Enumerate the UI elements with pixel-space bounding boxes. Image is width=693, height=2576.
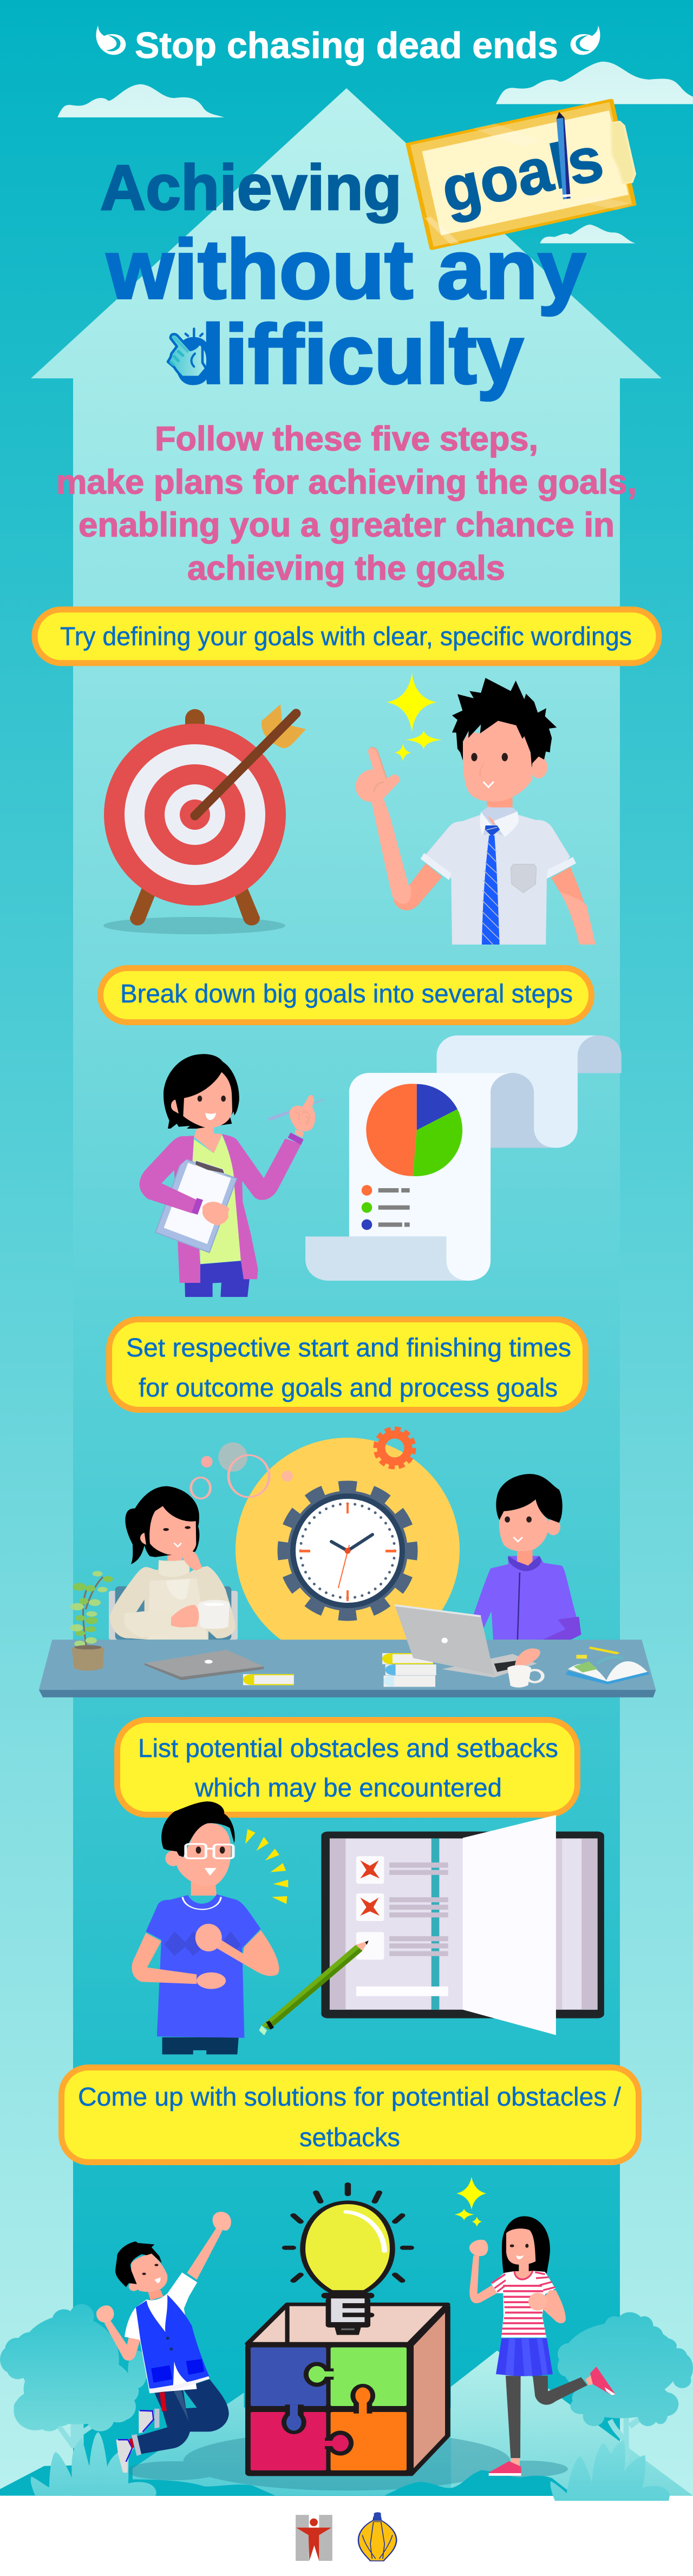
collar: [514, 2271, 533, 2279]
pants: [185, 1261, 250, 1297]
hands: [195, 1924, 226, 1989]
ear: [530, 756, 547, 778]
pants: [137, 2379, 229, 2454]
minute dots: [300, 1504, 395, 1598]
holding hand: [171, 1605, 199, 1628]
icon: left swoosh: [96, 25, 126, 55]
back roll: [578, 1035, 622, 1073]
white footer bar: [356, 1987, 448, 1996]
clipboard board: [408, 100, 635, 248]
rays: [285, 2185, 411, 2280]
puzzle piece green: [331, 2348, 407, 2406]
subtitle: achieving the goals: [187, 549, 505, 587]
mouth: [154, 2277, 160, 2283]
neck: [148, 2290, 164, 2300]
ear: [140, 1533, 146, 1545]
vest buttons: [166, 2337, 173, 2351]
front sheet: [349, 1073, 513, 1281]
step 5 pill: Come up with solutions for potential obstacles /: [78, 2083, 622, 2112]
mouth: [483, 782, 493, 787]
knob: blue into pink: [282, 2404, 306, 2434]
raised hand: [290, 1095, 315, 1138]
target shadow: [103, 917, 285, 934]
subtitle: make plans for achieving the goals,: [56, 463, 637, 501]
right fist: [528, 2292, 547, 2311]
open book: [566, 1657, 650, 1684]
closed laptop: [145, 1650, 264, 1680]
girl cheering: [454, 2177, 616, 2476]
light bulb: [285, 2185, 411, 2292]
upper shoe: [139, 2409, 159, 2433]
lower fist: [96, 2305, 114, 2323]
sweater gap: [136, 1600, 145, 1612]
target stand: [130, 709, 260, 926]
checklist item 2: [356, 1893, 448, 1921]
vest pockets: [151, 2359, 204, 2383]
mug: [507, 1665, 542, 1688]
eyes: [510, 2244, 528, 2248]
cardigan right: [222, 1134, 302, 1279]
subtitle: enabling you a greater chance in: [79, 506, 614, 544]
face: [463, 721, 532, 802]
left sleeve: [140, 1136, 197, 1214]
holding hand: [202, 1202, 230, 1225]
box side: [411, 2307, 448, 2474]
table edge: [39, 1690, 656, 1697]
skin arms: [132, 1930, 279, 1984]
eyes: [471, 753, 508, 761]
vest: [136, 2295, 210, 2389]
sparkles: [454, 2177, 486, 2227]
hour marks: [299, 1503, 396, 1601]
neck: [194, 1127, 222, 1153]
upper left arm: [394, 863, 442, 910]
ear: [546, 1519, 560, 1535]
cuffs: [192, 1132, 304, 1215]
clock and gears: [236, 1429, 460, 1662]
mouth: [205, 1868, 217, 1876]
scroll with pie chart: [305, 1035, 622, 1281]
clock hands: [331, 1535, 372, 1588]
notebook checklist: [321, 1815, 604, 2035]
chin hand: [181, 1550, 202, 1571]
collar: [480, 808, 519, 837]
t-shirt: [146, 1894, 261, 2038]
right tree: [558, 2312, 693, 2462]
checklist item 1: [356, 1856, 448, 1884]
step 2 pill: Break down big goals into several steps: [120, 980, 573, 1008]
orange gear: [376, 1429, 414, 1467]
emphasis ticks: [245, 1829, 288, 1904]
hair: [115, 2241, 162, 2287]
inner flap line: [285, 2304, 290, 2344]
right arm: [540, 2290, 566, 2323]
target rings: [104, 724, 286, 906]
hair: [496, 1474, 563, 1523]
clock face: [293, 1496, 402, 1605]
hair: [161, 1801, 235, 1857]
step 5 pill: setbacks: [299, 2123, 400, 2152]
man with glasses: [132, 1801, 369, 2054]
red stripe: [160, 2392, 167, 2411]
face: [506, 2228, 535, 2265]
glasses: [186, 1844, 233, 1858]
glass: [303, 2203, 393, 2292]
inner roll: [491, 1073, 556, 1148]
knob: green into blue: [304, 2362, 334, 2387]
t-shirt: [125, 2272, 197, 2393]
desk scene: [39, 1571, 656, 1697]
shirt diamonds: [165, 1931, 241, 1956]
title line 3: difficulty: [173, 307, 524, 401]
single book: [243, 1674, 294, 1685]
cup: [198, 1600, 230, 1629]
woman thinking: [109, 1486, 238, 1640]
flipping page: [463, 1815, 556, 2035]
zipper: [518, 1572, 520, 1640]
step 3 pill: [109, 1320, 586, 1410]
sleeve: [124, 1609, 173, 1637]
face: [499, 1499, 548, 1551]
right arm: [551, 867, 596, 945]
title line 1: Achieving: [100, 152, 402, 224]
neck: [517, 1549, 533, 1565]
neck: [191, 1882, 217, 1896]
face: [131, 2253, 167, 2292]
ear: [129, 2282, 139, 2291]
bottom landscape: [0, 2304, 693, 2501]
sleeve cuffs: [421, 853, 576, 880]
shadows: [126, 2431, 568, 2490]
raised arm: [187, 2227, 223, 2280]
ankles: [510, 2373, 594, 2466]
left arm: [469, 2255, 497, 2303]
jacket: [474, 1556, 581, 1655]
hair: [125, 1486, 199, 1564]
checklist item 3: [356, 1932, 448, 1959]
mouth: [174, 1543, 181, 1546]
chair: [109, 1587, 238, 1640]
man with laptop: [474, 1474, 581, 1655]
bookmark band: [432, 1838, 439, 2010]
page shading: [330, 1838, 598, 2010]
ear: [171, 1100, 179, 1113]
shirt hem: [148, 2376, 210, 2393]
tie: [482, 825, 500, 945]
puzzle piece orange: [331, 2412, 407, 2470]
open laptop: [395, 1604, 537, 1677]
hair: [164, 1054, 239, 1129]
pants fold: [173, 2389, 189, 2421]
clipboard: [155, 1158, 237, 1253]
step 3 pill: for outcome goals and process goals: [139, 1374, 558, 1402]
clouds: [57, 62, 693, 243]
turtle neck: [158, 1559, 189, 1577]
highlight: [346, 2212, 384, 2251]
box front: [245, 2344, 413, 2476]
pencil: [259, 1941, 369, 2035]
book stack: [382, 1653, 436, 1687]
raised fist: [213, 2212, 231, 2231]
icon: finger snap hand: [168, 329, 206, 377]
hair: [502, 2216, 550, 2273]
back sheet: [437, 1035, 599, 1148]
top heading: Stop chasing dead ends: [135, 25, 558, 66]
pages: [330, 1838, 598, 2010]
step 1 pill: Try defining your goals with clear, specific wordings: [60, 622, 632, 651]
face: [149, 1506, 196, 1556]
lower shoe: [116, 2434, 141, 2473]
step 1 pill: [35, 609, 659, 663]
bulb base: [321, 2293, 374, 2335]
foreground mounds: [0, 2466, 574, 2495]
badge: [511, 864, 537, 893]
eyes: [142, 2264, 159, 2275]
footer logos: [296, 2512, 396, 2561]
neck: [167, 1552, 182, 1562]
logo: golden hands: [358, 2512, 396, 2561]
subtitle: Follow these five steps,: [155, 420, 538, 458]
large gear: [284, 1487, 411, 1614]
knob: orange into green: [350, 2384, 375, 2414]
striped top: [491, 2271, 555, 2338]
shirt: [426, 815, 570, 945]
boy jumping: [96, 2212, 231, 2473]
legs: [506, 2376, 587, 2458]
left tree: [0, 2304, 148, 2448]
hills: [133, 2351, 693, 2495]
icon: right swoosh: [571, 25, 600, 55]
step 4 pill: List potential obstacles and setbacks: [138, 1734, 558, 1763]
notebook cover: [321, 1832, 604, 2018]
mouth: [205, 1113, 216, 1120]
pants: [162, 2037, 239, 2054]
right grass: [551, 2440, 670, 2501]
mouth: [514, 1537, 522, 1542]
pencil and eraser: [576, 1647, 619, 1659]
title line 2: without any: [106, 222, 586, 316]
woman with clipboard: [140, 1054, 324, 1297]
neck: [514, 2263, 533, 2279]
eyes: [198, 1096, 226, 1102]
forearm and hand: [356, 748, 411, 904]
puzzle piece pink: [251, 2412, 326, 2470]
sparkles: [387, 673, 442, 762]
sweater front: [148, 1579, 207, 1640]
sweater cable: [166, 1579, 191, 1600]
face: [183, 1072, 232, 1128]
bottom roll: [305, 1236, 468, 1281]
thought bubbles: [191, 1443, 293, 1498]
nose: [480, 763, 484, 776]
pie chart: [366, 1084, 462, 1176]
legend: [362, 1185, 410, 1230]
top: [192, 1135, 241, 1264]
lower sleeve: [533, 1617, 581, 1655]
pen: [269, 1099, 324, 1120]
shoes: [489, 2367, 616, 2476]
eyes: [196, 1846, 225, 1853]
face: [176, 1823, 231, 1886]
step 3 pill: Set respective start and finishing times: [126, 1334, 571, 1362]
yellow circle: [236, 1438, 460, 1662]
cardigan left body: [174, 1136, 200, 1283]
hand on laptop: [515, 1648, 540, 1667]
step 4 pill: which may be encountered: [194, 1774, 502, 1802]
sweater: [110, 1566, 236, 1640]
left grass: [31, 2432, 156, 2496]
clipboard with the word goals: [408, 100, 635, 248]
step 5 pill: [62, 2068, 639, 2162]
pen: [557, 112, 571, 199]
knob: pink into orange: [325, 2431, 354, 2456]
puzzle piece blue: [251, 2348, 326, 2406]
collar: [182, 1897, 221, 1910]
eyes: [505, 1517, 532, 1523]
boy pointing: [356, 673, 596, 945]
potted plant: [70, 1571, 113, 1671]
neck: [487, 797, 513, 821]
box top: [247, 2304, 448, 2344]
word goals: goals: [435, 123, 609, 225]
ear: [165, 1851, 181, 1866]
arrow in target: [195, 704, 306, 816]
step 2 pill: [101, 968, 591, 1022]
table top: [39, 1640, 656, 1690]
hair: [452, 678, 557, 768]
eyes: [163, 1526, 191, 1531]
skirt: [496, 2338, 553, 2376]
white footer band: [0, 2496, 693, 2576]
lower arm: [104, 2320, 140, 2361]
left fist: [469, 2240, 488, 2256]
leg gap: [183, 2389, 197, 2408]
mouth: [516, 2255, 524, 2259]
puzzle box: [245, 2293, 448, 2476]
finger creases: [371, 748, 387, 792]
collar: [508, 1556, 541, 1571]
step 4 pill: [117, 1720, 577, 1814]
subtitle: [56, 420, 637, 587]
icon: archery target: [103, 704, 306, 934]
logo: red figure: [296, 2515, 332, 2561]
